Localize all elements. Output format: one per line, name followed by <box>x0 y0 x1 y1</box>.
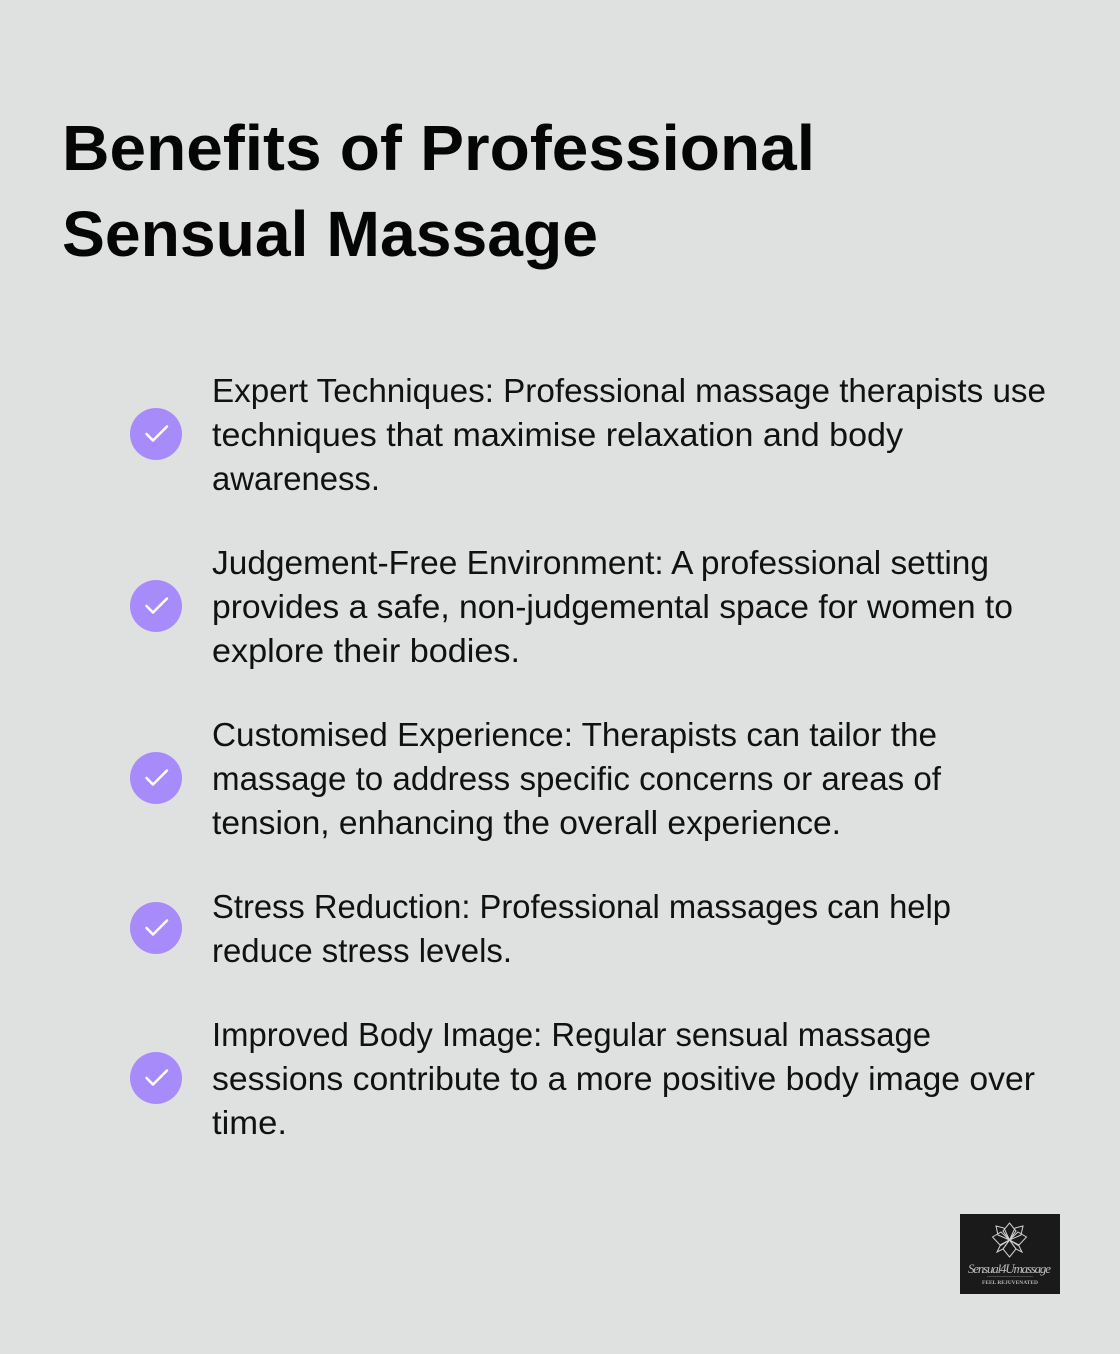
icon: check badge <box>130 1052 182 1104</box>
text: expert techniques: awareness. <box>212 460 380 497</box>
text: improved body image: Improved Body Image: Regular sensual massage <box>212 1016 931 1053</box>
list item: stress reduction <box>130 888 951 969</box>
icon: check badge <box>130 580 182 632</box>
logo wordmark: Sensual4Umassage <box>968 1261 1051 1276</box>
list item: customised experience <box>130 716 942 841</box>
text: judgement-free environment: explore their bodies. <box>212 632 520 669</box>
text: improved body image <box>212 1016 1035 1141</box>
text: stress reduction: Stress Reduction: Professional massages can help <box>212 888 951 925</box>
text: judgement-free environment: Judgement-Free Environment: A professional setting <box>212 544 989 581</box>
logo <box>960 1214 1060 1294</box>
text: expert techniques <box>212 372 1046 497</box>
text: stress reduction <box>212 888 951 969</box>
logo tagline: FEEL REJUVENATED <box>982 1280 1038 1286</box>
logo divider <box>987 1276 1033 1278</box>
text: improved body image: sessions contribute to a more positive body image over <box>212 1060 1035 1097</box>
text: customised experience <box>212 716 942 841</box>
icon: check badge <box>130 752 182 804</box>
text: judgement-free environment: provides a safe, non-judgemental space for women to <box>212 588 1013 625</box>
icon: check badge <box>130 408 182 460</box>
text: expert techniques: Expert Techniques: Professional massage therapists use <box>212 372 1046 409</box>
title: Benefits of Professional <box>62 112 815 184</box>
text: stress reduction: reduce stress levels. <box>212 932 512 969</box>
title: Sensual Massage <box>62 198 598 270</box>
text: improved body image: time. <box>212 1104 287 1141</box>
list item: judgement-free environment <box>130 544 1013 669</box>
text: customised experience: tension, enhancing the overall experience. <box>212 804 841 841</box>
icon: check badge <box>130 902 182 954</box>
text: expert techniques: techniques that maximise relaxation and body <box>212 416 904 453</box>
text: customised experience: massage to address specific concerns or areas of <box>212 760 942 797</box>
text: judgement-free environment <box>212 544 1013 669</box>
text: customised experience: Customised Experience: Therapists can tailor the <box>212 716 937 753</box>
title <box>62 112 815 270</box>
icon: lotus flower <box>992 1223 1026 1257</box>
list item: improved body image <box>130 1016 1035 1141</box>
list item: expert techniques <box>130 372 1046 497</box>
